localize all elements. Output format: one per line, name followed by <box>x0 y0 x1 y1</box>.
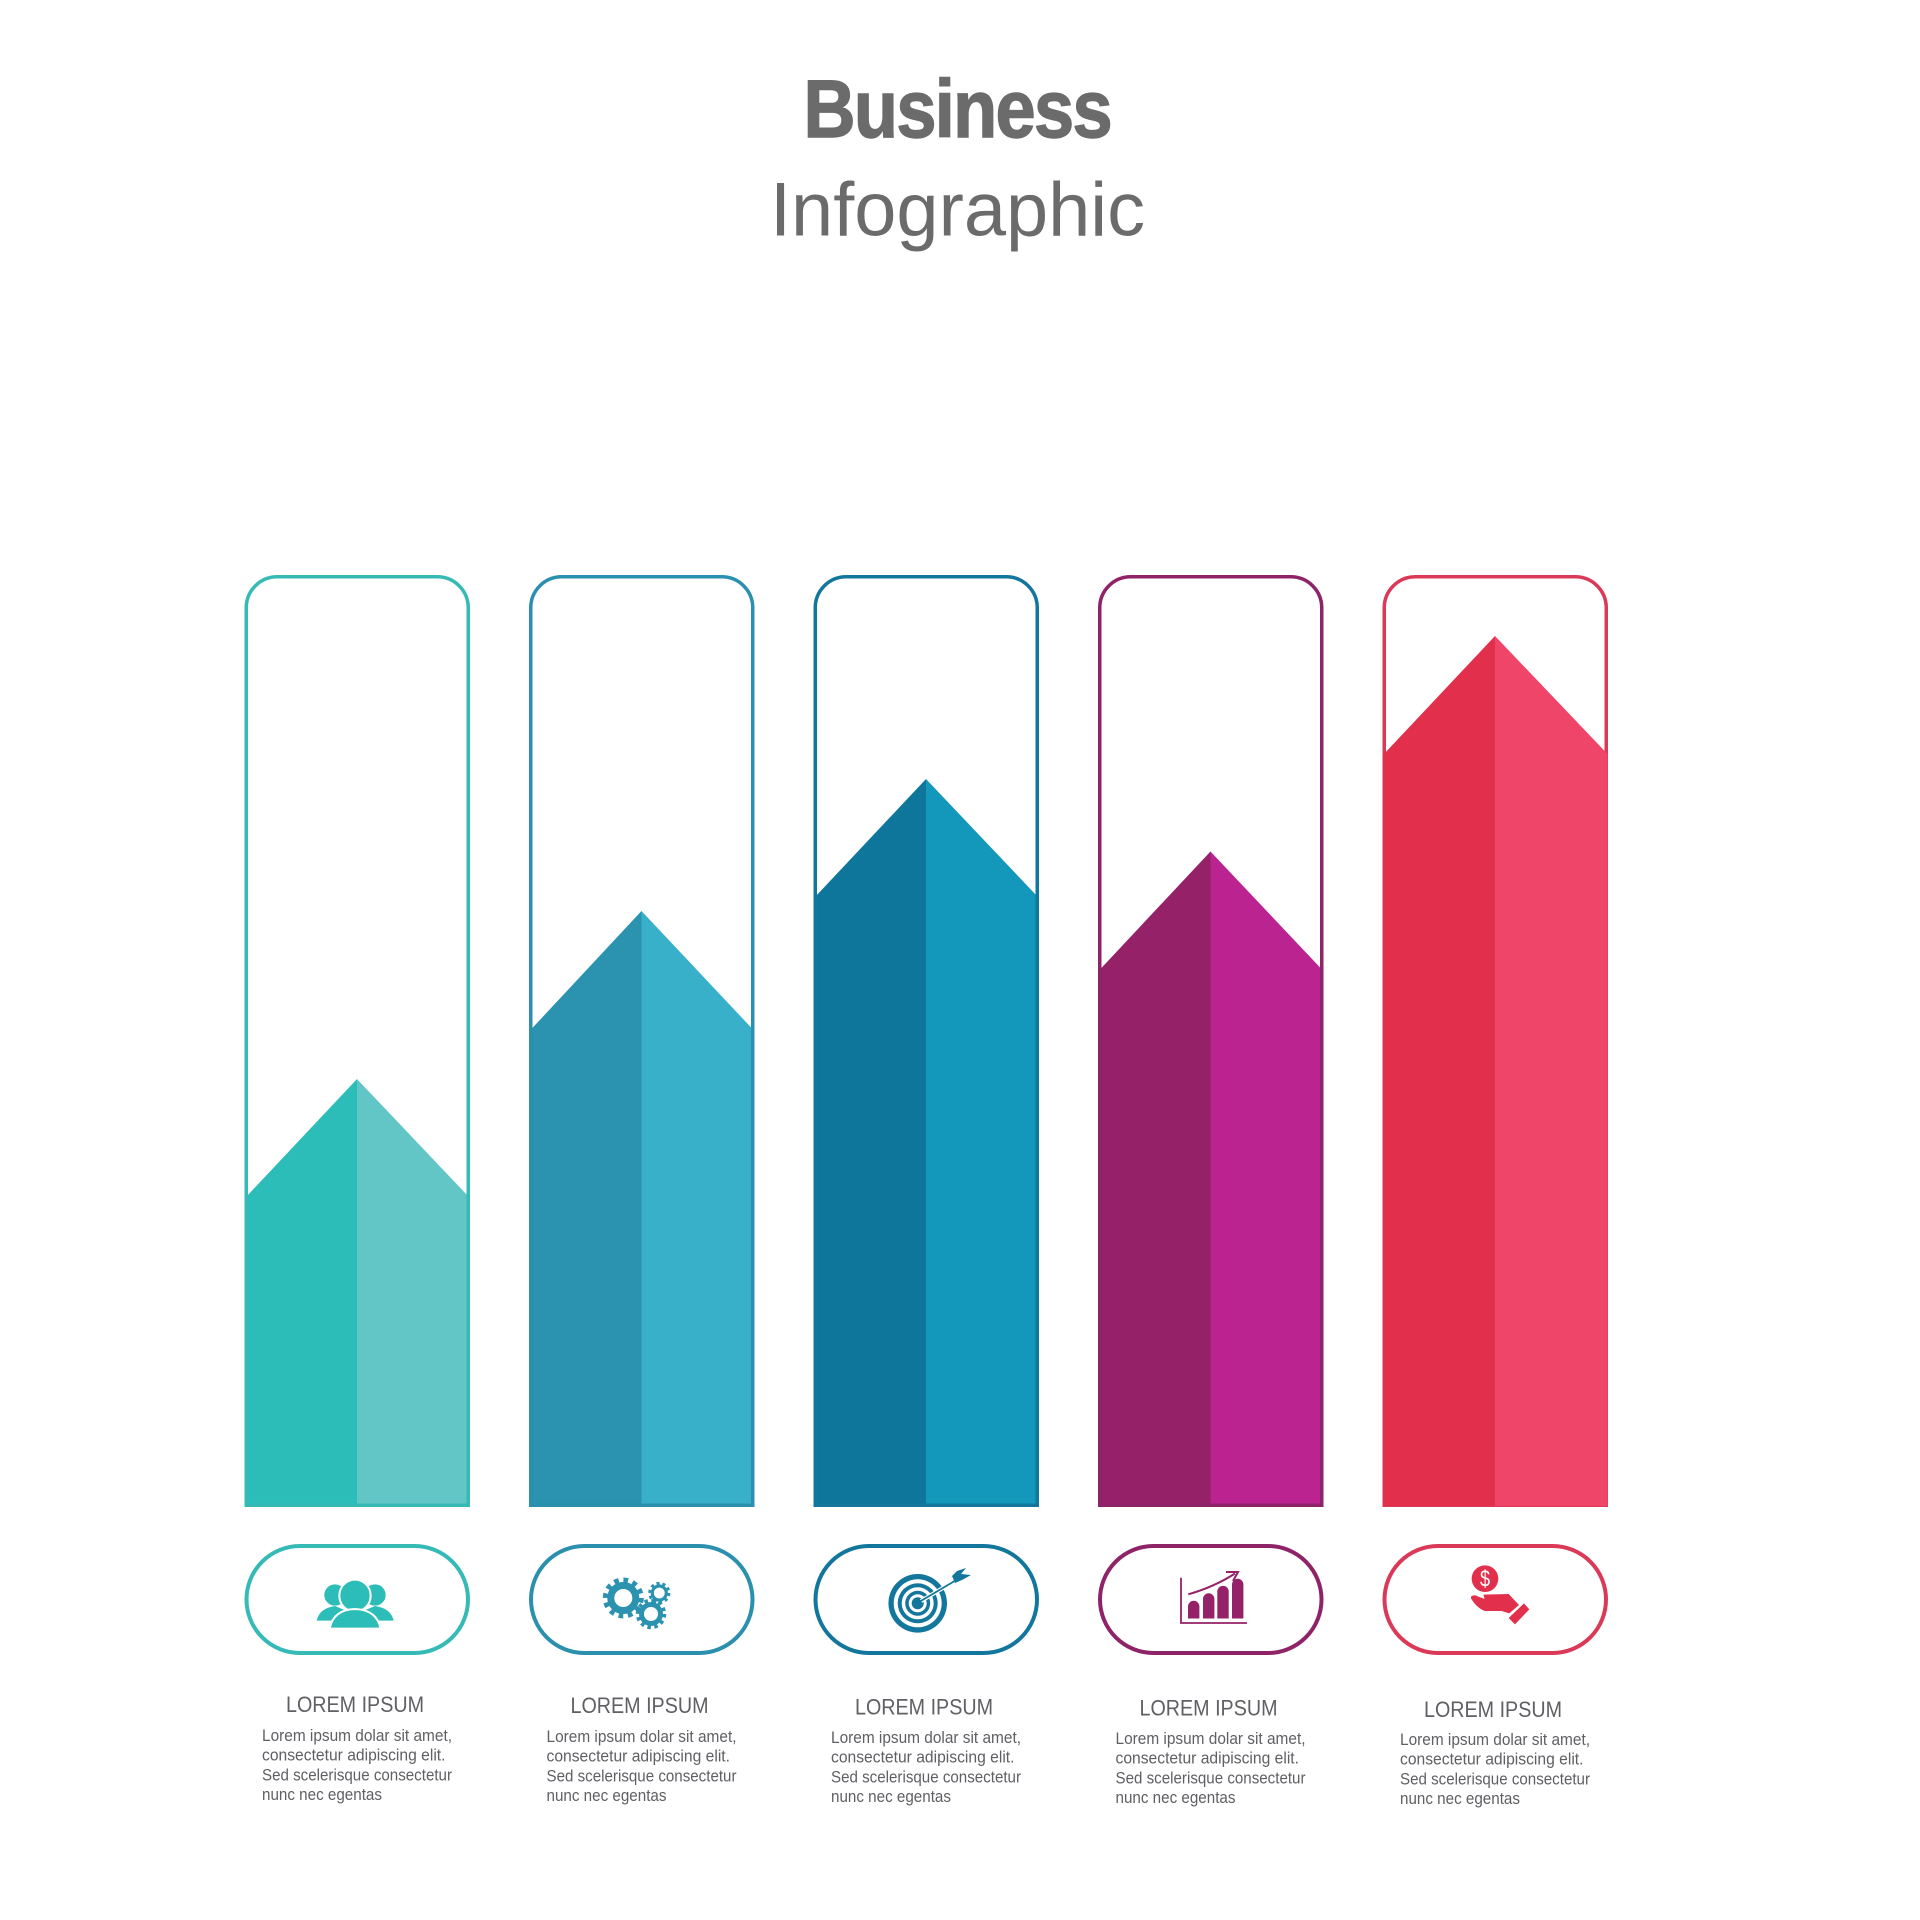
body text: nunc nec egentas <box>262 1786 382 1804</box>
title line: Infographic: Infographic <box>770 168 1145 252</box>
body text: consectetur adipiscing elit. <box>546 1748 730 1766</box>
heading: LOREM IPSUM <box>1140 1696 1278 1721</box>
outline frame <box>246 577 468 1505</box>
text block: column 4 <box>1116 1696 1306 1807</box>
body text <box>262 1727 452 1804</box>
heading: LOREM IPSUM <box>286 1692 424 1717</box>
body text: Lorem ipsum dolar sit amet, <box>546 1728 736 1746</box>
text block: column 1 <box>262 1692 452 1804</box>
body text: Lorem ipsum dolar sit amet, <box>1116 1730 1306 1748</box>
arrow bar left half <box>530 911 642 1506</box>
panel: column 2 icon pill <box>531 1546 752 1653</box>
panel: column 5 icon pill <box>1384 1546 1606 1653</box>
text block: column 2 <box>546 1693 737 1805</box>
body text: Sed scelerisque consectetur <box>1400 1770 1590 1788</box>
panel: column 1 icon pill <box>246 1546 468 1653</box>
title <box>770 64 1145 253</box>
heading: LOREM IPSUM <box>1424 1697 1562 1722</box>
outline frame <box>531 577 753 1505</box>
arrow bar right half <box>1210 852 1322 1506</box>
outline frame <box>815 577 1037 1505</box>
panel: column 1 bar <box>246 577 468 1506</box>
arrow bar left half <box>1383 636 1495 1506</box>
panel: column 4 bar <box>1100 577 1322 1506</box>
body text: nunc nec egentas <box>1116 1789 1236 1807</box>
icon: rising bar chart <box>1181 1572 1247 1623</box>
icon: hand holding coin <box>1471 1565 1529 1624</box>
body text: Lorem ipsum dolar sit amet, <box>1400 1731 1590 1749</box>
icon: people <box>317 1580 394 1629</box>
icon: target with arrow <box>888 1568 971 1633</box>
arrow bar right half <box>357 1079 468 1506</box>
body text <box>831 1729 1021 1806</box>
arrow bar right half <box>1495 636 1608 1506</box>
pill outline <box>1384 1546 1606 1653</box>
body text: nunc nec egentas <box>1400 1790 1520 1808</box>
body text <box>1400 1731 1590 1808</box>
body text: consectetur adipiscing elit. <box>1116 1750 1299 1768</box>
text block: column 3 <box>831 1694 1021 1806</box>
arrow bar right half <box>926 779 1037 1506</box>
panel: column 2 bar <box>530 577 753 1506</box>
body text <box>546 1728 737 1805</box>
arrow bar left half <box>815 779 926 1506</box>
body text: nunc nec egentas <box>831 1788 951 1806</box>
outline frame <box>1384 577 1606 1505</box>
pill outline <box>816 1546 1037 1653</box>
pill outline <box>246 1546 468 1653</box>
outline frame <box>1100 577 1322 1505</box>
body text <box>1116 1730 1306 1807</box>
arrow bar left half <box>246 1079 357 1506</box>
text block: column 5 <box>1400 1697 1590 1808</box>
panel: column 3 icon pill <box>816 1546 1037 1653</box>
body text: consectetur adipiscing elit. <box>831 1749 1014 1767</box>
panel: column 5 bar <box>1383 577 1608 1506</box>
icon: hand holding coin: $ <box>1480 1567 1491 1592</box>
pill outline <box>1100 1546 1322 1653</box>
body text: Sed scelerisque consectetur <box>831 1768 1021 1786</box>
icon: gears <box>606 1580 669 1627</box>
body text: consectetur adipiscing elit. <box>262 1747 446 1765</box>
panel: column 4 icon pill <box>1100 1546 1322 1653</box>
panel: column 3 bar <box>815 577 1037 1506</box>
body text: Lorem ipsum dolar sit amet, <box>831 1729 1021 1747</box>
arrow bar left half <box>1100 852 1210 1506</box>
heading: LOREM IPSUM <box>855 1694 993 1719</box>
arrow bar right half <box>642 911 752 1506</box>
body text: Sed scelerisque consectetur <box>546 1767 737 1785</box>
pill outline <box>531 1546 752 1653</box>
title line: Business: Business <box>804 64 1111 155</box>
heading: LOREM IPSUM <box>570 1693 708 1718</box>
body text: consectetur adipiscing elit. <box>1400 1751 1584 1769</box>
body text: nunc nec egentas <box>546 1787 666 1805</box>
body text: Sed scelerisque consectetur <box>1116 1769 1306 1787</box>
body text: Sed scelerisque consectetur <box>262 1766 452 1784</box>
body text: Lorem ipsum dolar sit amet, <box>262 1727 452 1745</box>
